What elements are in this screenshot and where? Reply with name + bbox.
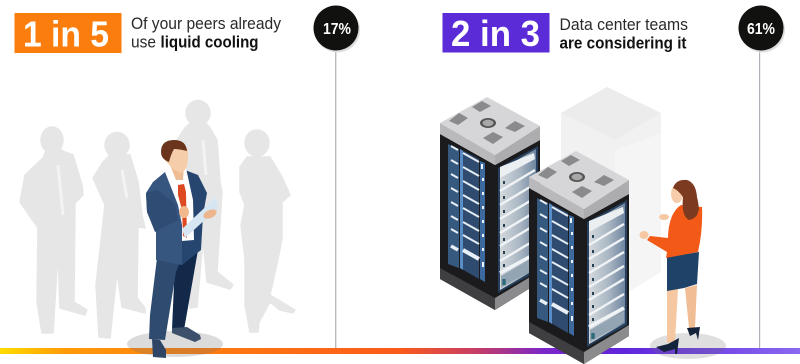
- server rack front: [529, 151, 629, 364]
- head: [163, 142, 188, 173]
- floor shadow: woman: [650, 333, 726, 359]
- badge 61%: 61%: [747, 21, 775, 38]
- right caption: are considering it: [560, 34, 687, 52]
- server rack back: [440, 97, 540, 310]
- left caption: use: [131, 32, 156, 52]
- skirt: [667, 252, 699, 291]
- purple stat box: 2 in 3: [451, 13, 540, 54]
- ghost peer 2: [93, 132, 145, 338]
- shoes: [172, 327, 201, 342]
- floor shadow: man: [127, 331, 223, 357]
- jacket back: [175, 170, 207, 265]
- neck: [170, 165, 184, 180]
- sleeve: [146, 190, 178, 232]
- legs: [667, 289, 678, 343]
- head: [671, 185, 683, 203]
- right caption: Data center teams: [560, 15, 688, 34]
- badge 61%: [738, 6, 785, 52]
- shirt: [165, 168, 194, 241]
- hands: [640, 231, 648, 239]
- hair: [673, 180, 699, 220]
- jacket front: [146, 172, 182, 265]
- ghost peer 3: [177, 100, 233, 308]
- badge 17%: 17%: [323, 21, 351, 38]
- woman facing racks: [640, 180, 702, 354]
- tablet: [182, 197, 218, 238]
- ghost peer 1: [20, 127, 87, 333]
- right leg: [172, 250, 198, 330]
- sweater: [647, 205, 702, 258]
- high heels: [656, 338, 679, 354]
- right caption: [560, 15, 688, 52]
- ghost silhouettes of peers: [20, 100, 295, 338]
- gradient baseline bar: [0, 348, 800, 354]
- hands: [179, 206, 189, 218]
- man with tablet: [146, 140, 218, 358]
- divider line left: [335, 48, 336, 354]
- hair: [161, 140, 187, 162]
- orange stat box: 1 in 5: [23, 14, 109, 54]
- badge 17%: [314, 6, 360, 52]
- ghost peer 4: [240, 130, 295, 332]
- ghost server rack: [561, 87, 661, 300]
- left leg: [149, 258, 180, 340]
- tie: [178, 184, 187, 238]
- left caption: liquid cooling: [160, 32, 258, 52]
- left caption: [131, 14, 281, 52]
- left caption: Of your peers already: [131, 14, 281, 33]
- divider line right: [759, 48, 760, 354]
